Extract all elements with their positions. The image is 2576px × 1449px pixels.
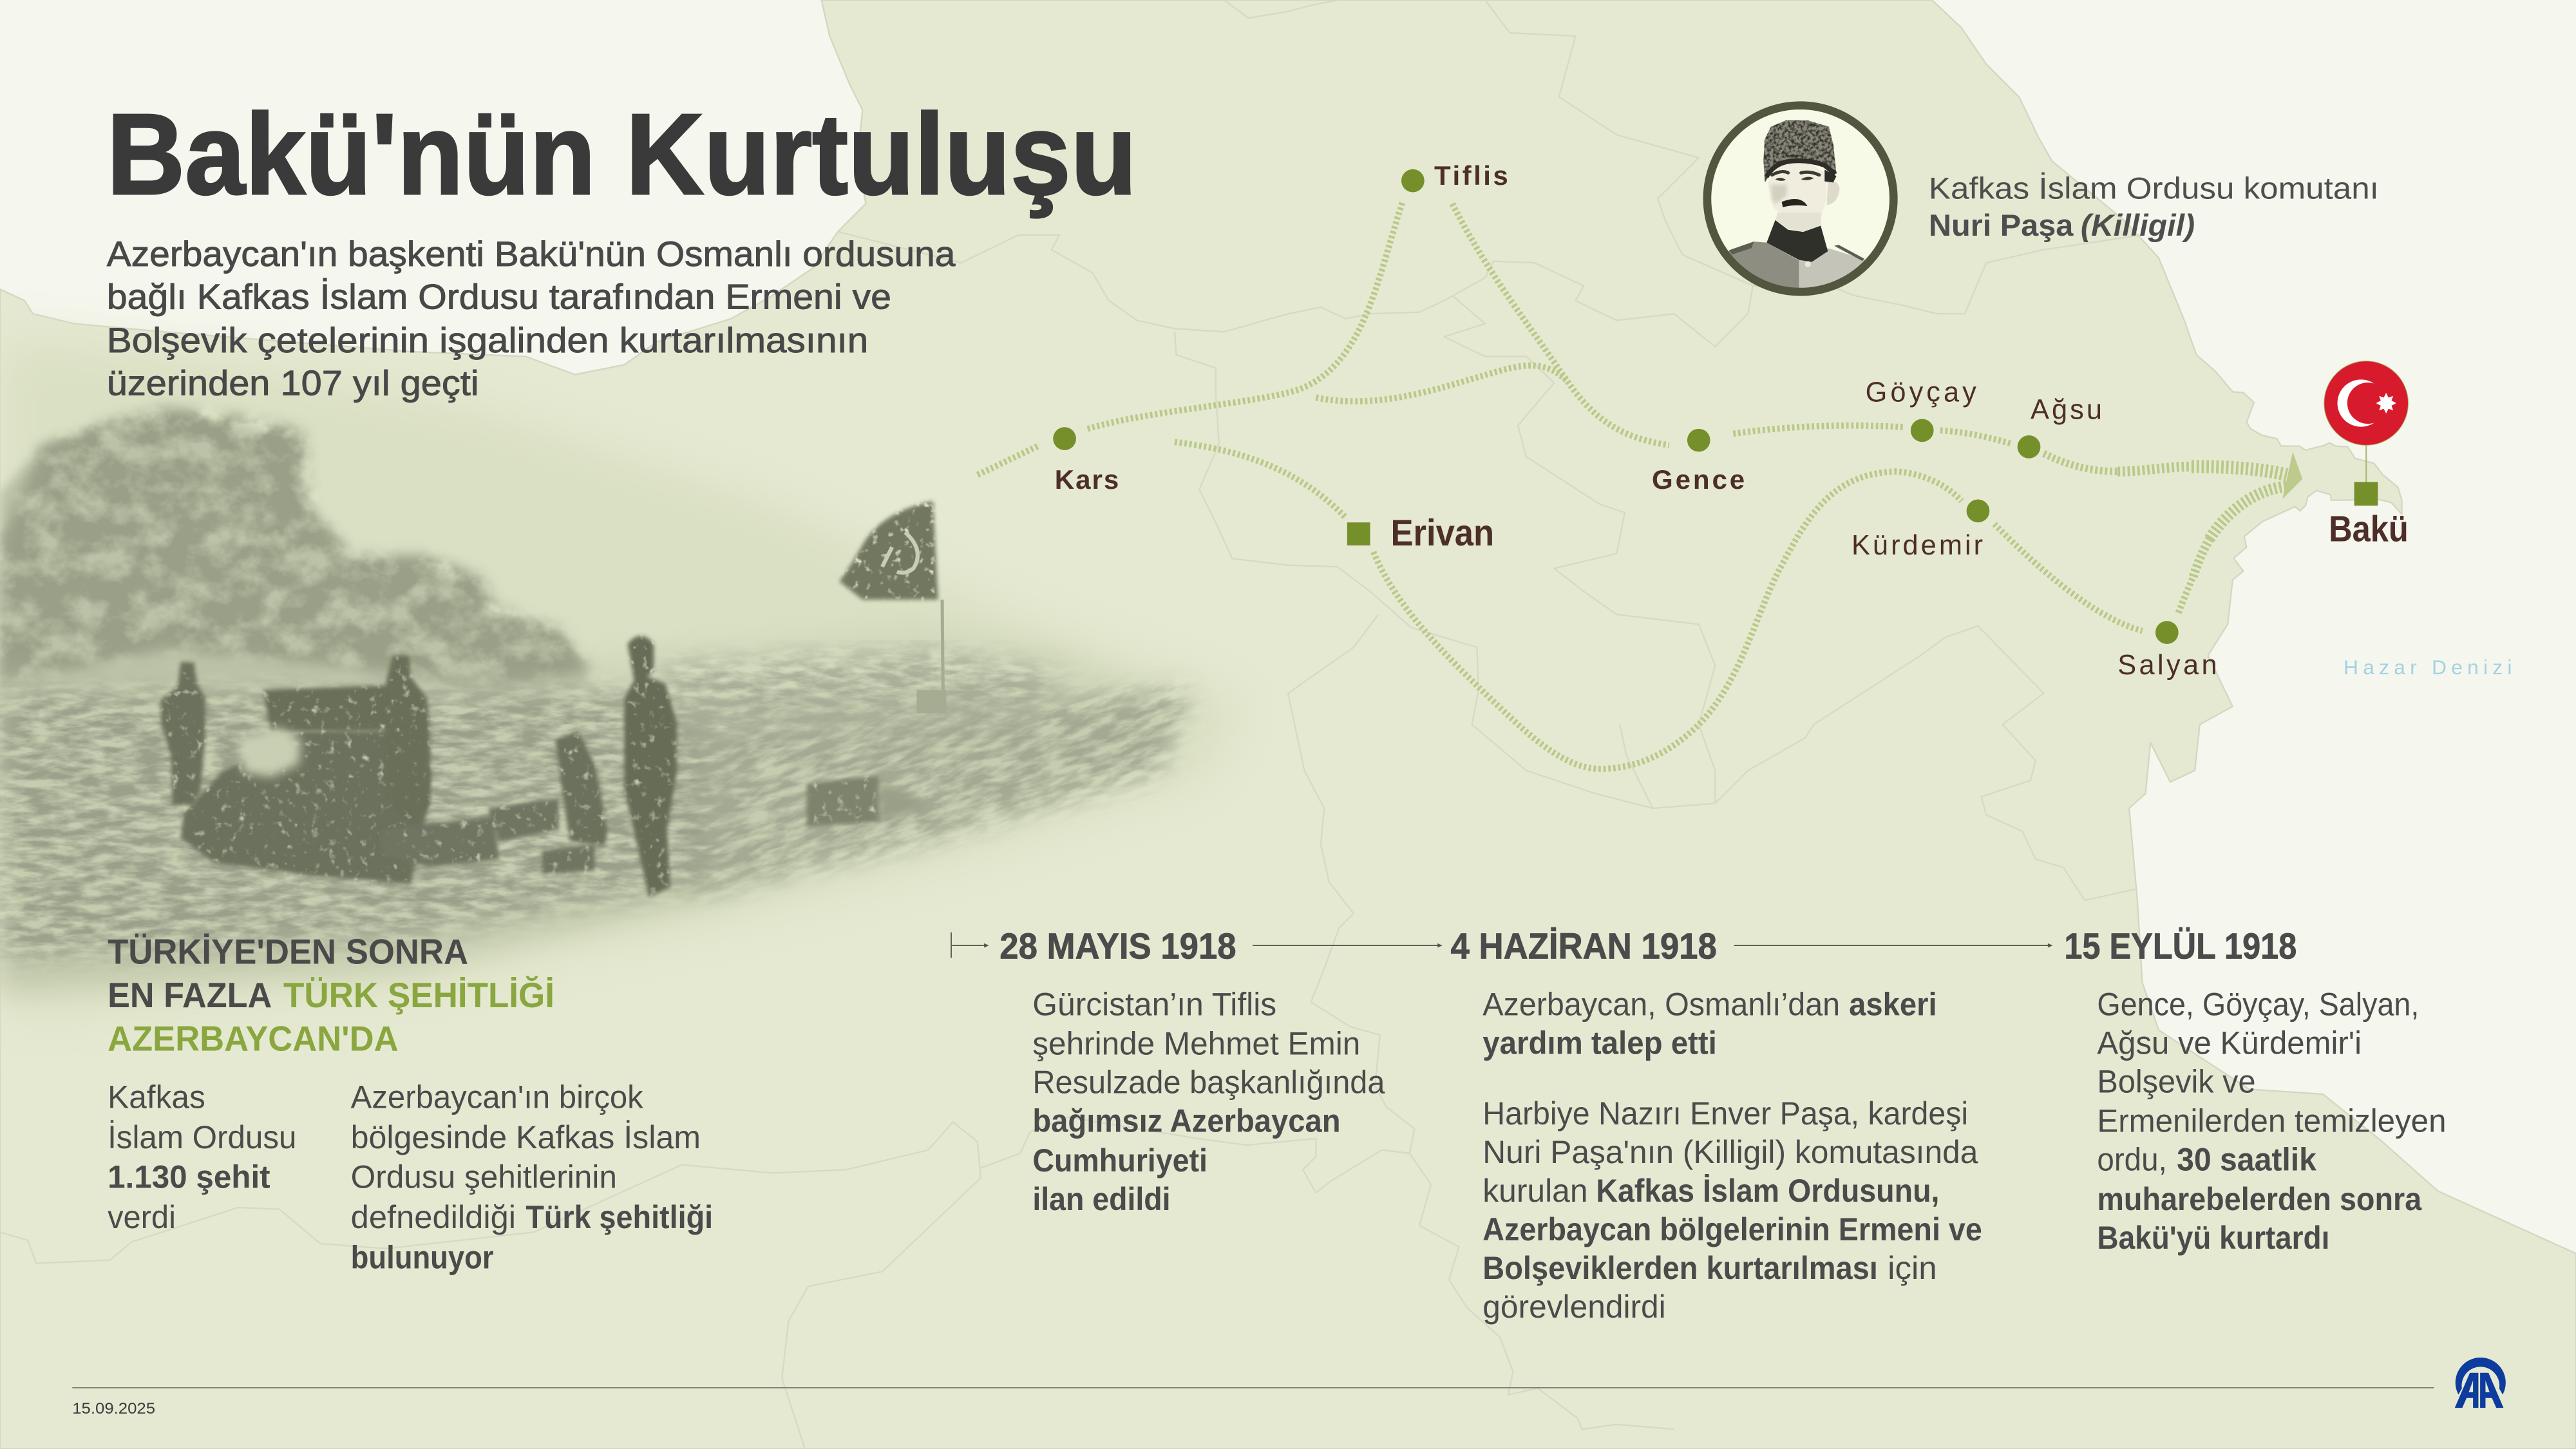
- photo: soldier 2: [386, 656, 430, 822]
- text block: 15 Eylül: Bolşevik ve: [2097, 1063, 2256, 1099]
- text block: 15 Eylül: [2097, 987, 2446, 1256]
- photo: flag: [840, 501, 938, 600]
- text block: 15 Eylül: Gence, Göyçay, Salyan,: [2097, 987, 2419, 1023]
- map routes: [978, 200, 2302, 769]
- photo: flag pole and base: [916, 600, 946, 713]
- uniform right: [1799, 248, 1866, 290]
- subtitle: Bolşevik çetelerinin işgalinden kurtarılmasının: [107, 320, 868, 360]
- text block: 4 Haziran: yardım talep etti: [1482, 1025, 1717, 1061]
- hair: [1824, 169, 1837, 182]
- route: into Kars: [978, 445, 1040, 475]
- route: Gence to Göyçay: [1733, 426, 1904, 433]
- text block: 4 Haziran: görevlendirdi: [1482, 1289, 1666, 1325]
- photo: gun shield: [263, 685, 394, 731]
- text block: 28 Mayıs: Resulzade başkanlığında: [1032, 1065, 1385, 1101]
- route: Ağsu to Bakü: [2043, 453, 2287, 475]
- brows and eyes: [1772, 172, 1819, 175]
- portrait caption: Nuri Paşa: [1929, 209, 2074, 243]
- moustache: [1782, 199, 1808, 207]
- photo: horizon streaks: [657, 649, 1068, 739]
- footer date: 15.09.2025: [72, 1400, 155, 1417]
- collar: [1766, 220, 1828, 262]
- hat lower band: [1766, 161, 1835, 177]
- photo: far horizon: [493, 624, 1150, 772]
- photo wash: [0, 337, 1249, 1019]
- timeline: [951, 926, 2297, 967]
- button: [1805, 261, 1811, 267]
- text block: martyrs' cemetery: Türk şehitliği: [526, 1199, 713, 1235]
- city: Tiflis: Tiflis: [1434, 160, 1508, 191]
- city: Kürdemir: Kürdemir: [1852, 530, 1983, 561]
- text block: martyrs' cemetery: Ordusu şehitlerinin: [351, 1159, 617, 1195]
- portrait background: [1707, 106, 1893, 292]
- text block: 28 Mayıs: [1032, 987, 1385, 1217]
- subtitle: üzerinden 107 yıl geçti: [107, 363, 479, 403]
- text block: 28 Mayıs: ilan edildi: [1032, 1181, 1171, 1217]
- city: Göyçay: [1866, 377, 1976, 442]
- text block: 15 Eylül: Ermenilerden temizleyen: [2097, 1103, 2446, 1139]
- route: Kars to Erivan: [1175, 442, 1345, 518]
- photo: bent soldier light shirt: [238, 728, 301, 777]
- ear: [1827, 182, 1840, 205]
- city: Kars: [1053, 427, 1119, 495]
- photo: Ottoman artillery under smoke, faded into the map: [0, 337, 1249, 1019]
- portrait caption: Kafkas İslam Ordusu komutanı: [1929, 172, 2379, 206]
- text block: 4 Haziran: kurulan: [1482, 1173, 1588, 1209]
- photo: ammunition boxes: [381, 799, 594, 874]
- route: Erivan to Kürdemir: [1374, 471, 1962, 769]
- face: [1768, 164, 1826, 217]
- text block: 1.130 martyrs: verdi: [108, 1199, 176, 1235]
- route: Salyan to Bakü: [2179, 486, 2287, 613]
- portrait caption: (Killigil): [2081, 209, 2195, 243]
- photo: kneeling soldier: [555, 731, 608, 846]
- fur hat: [1763, 120, 1837, 182]
- text block: martyrs' cemetery: Azerbaycan'ın birçok: [351, 1079, 644, 1115]
- heading: martyrs section: [108, 932, 554, 1058]
- photo: tall soldier: [624, 636, 677, 897]
- city: Kürdemir: [1852, 500, 1989, 561]
- text block: 4 Haziran: Harbiye Nazırı Enver Paşa, kardeşi: [1482, 1095, 1968, 1132]
- route: Tiflis to Gence: [1452, 204, 1669, 445]
- photo: smoke cloud base: [0, 417, 588, 788]
- date: 4 Haziran 1918: 4 HAZİRAN 1918: [1451, 926, 1717, 967]
- route: Kars to Tiflis: [1088, 200, 1403, 429]
- text block: 4 Haziran: için: [1888, 1250, 1937, 1286]
- city: Erivan: [1347, 513, 1494, 554]
- epaulettes: [1729, 242, 1864, 261]
- subtitle: [107, 234, 956, 403]
- city: Gence: Gence: [1652, 464, 1745, 495]
- city: Salyan: Salyan: [2117, 650, 2217, 681]
- photo: crate: [807, 775, 923, 826]
- subtitle: bağlı Kafkas İslam Ordusu tarafından Ermeni ve: [107, 277, 891, 317]
- text block: 28 Mayıs: bağımsız Azerbaycan: [1032, 1103, 1341, 1139]
- heading: martyrs section: AZERBAYCAN'DA: [108, 1018, 399, 1058]
- photo: ground streaks, left: [0, 690, 723, 961]
- photo: ground base: [0, 682, 1183, 994]
- text block: martyrs' cemetery: bölgesinde Kafkas İslam: [351, 1119, 701, 1155]
- icon: Azerbaijan flag: [2324, 361, 2409, 445]
- heading: martyrs section: TÜRK ŞEHİTLİĞİ: [283, 975, 554, 1015]
- text block: 1.130 martyrs: [108, 1079, 296, 1235]
- photo: flag crescent: [882, 533, 918, 573]
- Bakü label: Bakü: [2329, 509, 2409, 549]
- route: branch towards Gence: [1316, 366, 1567, 401]
- neck: [1776, 213, 1821, 232]
- city: Ağsu: [2018, 395, 2102, 459]
- text block: 15 Eylül: Ağsu ve Kürdemir'i: [2097, 1025, 2362, 1061]
- heading: martyrs section: TÜRKİYE'DEN SONRA: [108, 932, 468, 972]
- arrowhead: [2282, 452, 2302, 499]
- subtitle: Azerbaycan'ın başkenti Bakü'nün Osmanlı ordusuna: [107, 234, 956, 274]
- text block: martyrs' cemetery: [351, 1079, 713, 1275]
- connector arrows: [984, 943, 2053, 947]
- text block: 4 Haziran: Bolşeviklerden kurtarılması: [1482, 1250, 1878, 1286]
- uniform left: [1728, 242, 1800, 290]
- text block: 4 Haziran: Azerbaycan bölgelerinin Ermeni ve: [1482, 1211, 1982, 1247]
- text block: 4 Haziran: Nuri Paşa'nın (Killigil) komutasında: [1482, 1134, 1978, 1170]
- Bakü marker with flag: [2324, 361, 2409, 549]
- label: Hazar Denizi: Hazar Denizi: [2344, 656, 2512, 679]
- route: Kürdemir to Salyan: [1994, 524, 2143, 631]
- text block: 4 Haziran: askeri: [1849, 987, 1937, 1023]
- text block: 15 Eylül: Bakü'yü kurtardı: [2097, 1220, 2329, 1256]
- route: Göyçay to Ağsu: [1940, 430, 2011, 444]
- city: Salyan: [2117, 621, 2217, 681]
- text block: 4 Haziran: [1482, 987, 1982, 1325]
- text block: 28 Mayıs: Cumhuriyeti: [1032, 1142, 1208, 1179]
- photo: standing soldier 1: [161, 662, 205, 805]
- text block: 1.130 martyrs: 1.130 şehit: [108, 1159, 270, 1195]
- text block: martyrs' cemetery: bulunuyor: [351, 1239, 494, 1275]
- heading: martyrs section: EN FAZLA: [108, 975, 272, 1015]
- leader line: [2365, 445, 2367, 483]
- portrait: Nuri Paşa: [1707, 106, 1893, 292]
- text block: 28 Mayıs: şehrinde Mehmet Emin: [1032, 1026, 1360, 1062]
- title: Bakü'nün Kurtuluşu: [107, 90, 1137, 218]
- cheek shade: [1771, 185, 1787, 204]
- footer rule: [72, 1387, 2434, 1388]
- text block: 28 Mayıs: Gürcistan’ın Tiflis: [1032, 987, 1276, 1023]
- portrait caption: [1929, 172, 2379, 243]
- city: Kars: Kars: [1055, 464, 1119, 495]
- text block: martyrs' cemetery: defnedildiği: [351, 1199, 516, 1235]
- city: Tiflis: [1401, 160, 1508, 192]
- city: Ağsu: Ağsu: [2031, 395, 2102, 426]
- city: Gence: [1652, 429, 1745, 495]
- text block: 15 Eylül: muharebelerden sonra: [2097, 1181, 2422, 1217]
- date: 15 Eylül 1918: 15 EYLÜL 1918: [2064, 926, 2297, 967]
- city: Göyçay: Göyçay: [1866, 377, 1976, 408]
- text block: 1.130 martyrs: İslam Ordusu: [108, 1119, 296, 1155]
- text block: 15 Eylül: 30 saatlik: [2177, 1142, 2316, 1178]
- timeline connectors: [951, 933, 2050, 958]
- icon: AA logo: [2455, 1358, 2506, 1408]
- Bakü square: [2354, 482, 2378, 506]
- text block: 4 Haziran: Kafkas İslam Ordusunu,: [1596, 1173, 1939, 1209]
- photo: dark smoke: [0, 408, 591, 690]
- text block: 4 Haziran: Azerbaycan, Osmanlı’dan: [1482, 987, 1840, 1023]
- photo: gun and crew: [181, 731, 430, 884]
- text block: 15 Eylül: ordu,: [2097, 1142, 2167, 1178]
- portrait ring: [1707, 106, 1893, 292]
- text block: 1.130 martyrs: Kafkas: [108, 1079, 205, 1115]
- city: Erivan: Erivan: [1390, 513, 1494, 554]
- photo: ground streaks, right diagonal: [639, 573, 1211, 922]
- date: 28 Mayıs 1918: 28 MAYIS 1918: [999, 926, 1236, 967]
